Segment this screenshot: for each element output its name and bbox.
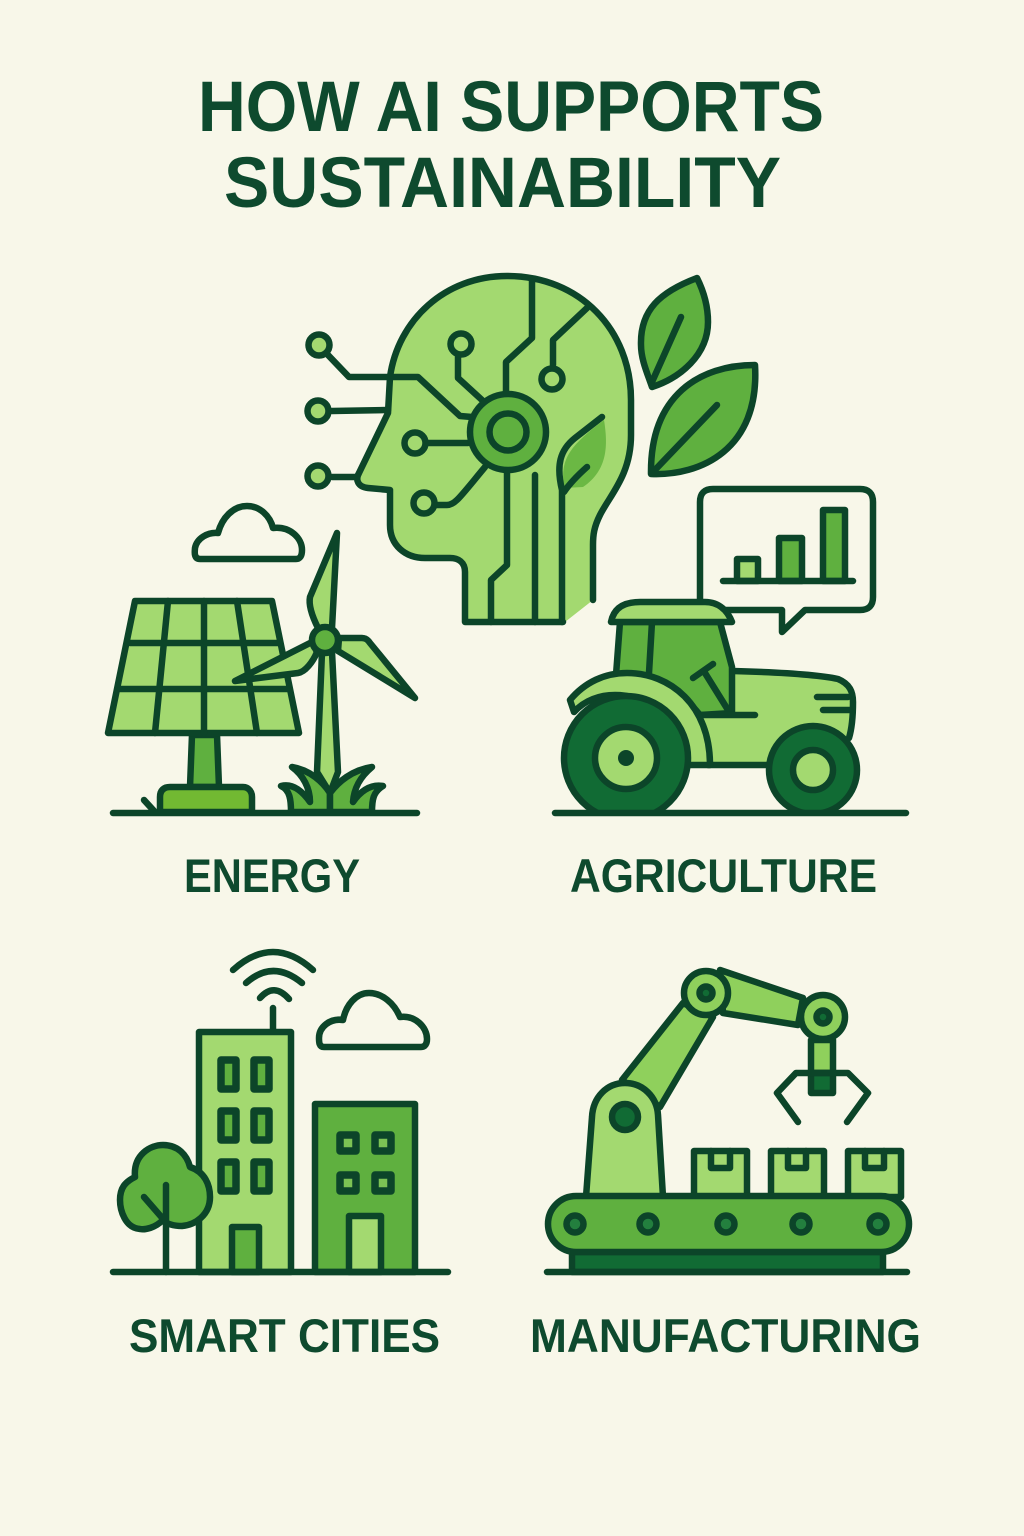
solar panel stand [190,735,219,787]
cloud [195,506,302,559]
tall building [199,1032,291,1272]
rollers [566,1216,886,1232]
icon: tractor [555,602,906,820]
ground line [547,1269,907,1275]
central chip node [470,394,546,470]
title: SUSTAINABILITY [224,144,781,223]
ground line [113,1269,448,1275]
bar chart [723,510,853,581]
label: energy: ENERGY [184,849,360,902]
boxes [694,1151,901,1197]
elbow joint [684,971,728,1015]
title: HOW AI SUPPORTS [198,68,824,147]
head silhouette [357,276,631,622]
arm base [586,1083,663,1197]
cab [616,622,732,715]
infographic canvas [104,80,918,1352]
icon: manufacturing robot arm [547,970,909,1272]
conveyor belt [548,1196,909,1252]
input nodes [308,334,562,514]
grass tick [144,800,155,812]
icon: analytics speech bubble [700,489,873,632]
title [198,68,824,223]
icon: lower leaf [651,365,755,474]
base joint [612,1104,638,1130]
icon: AI head with circuits [308,276,631,622]
wrist [811,1040,833,1073]
rear fender [570,673,710,765]
head outline [357,276,631,622]
ground line [113,810,417,816]
front wheel [769,726,857,814]
upper arm [622,1003,713,1107]
forearm [720,970,803,1025]
icon: smart cities [113,952,448,1272]
icon: upper leaf [641,278,708,387]
wind turbine tower [317,652,338,793]
steering wheel [693,664,728,710]
grass [281,767,383,812]
label: smart cities: SMART CITIES [129,1309,440,1362]
circuit lines [328,280,587,622]
rear wheel [564,696,688,820]
roof [611,602,732,622]
hood and body [695,671,853,765]
solar panel [108,601,299,733]
solar panel base [160,787,252,812]
tree [120,1145,210,1272]
turbine blades [235,533,415,698]
dash and grille lines [700,697,850,715]
wrist joint [801,995,845,1039]
icon: energy solar and wind [108,506,417,813]
cloud [319,993,427,1047]
inner leaf [559,417,606,622]
short building [315,1104,415,1272]
label: manufacturing: MANUFACTURING [530,1309,921,1362]
conveyor stand [572,1252,883,1272]
wifi signal [233,952,313,1032]
label: agriculture: AGRICULTURE [570,849,877,902]
ground line [555,810,906,816]
gripper [777,1073,868,1122]
